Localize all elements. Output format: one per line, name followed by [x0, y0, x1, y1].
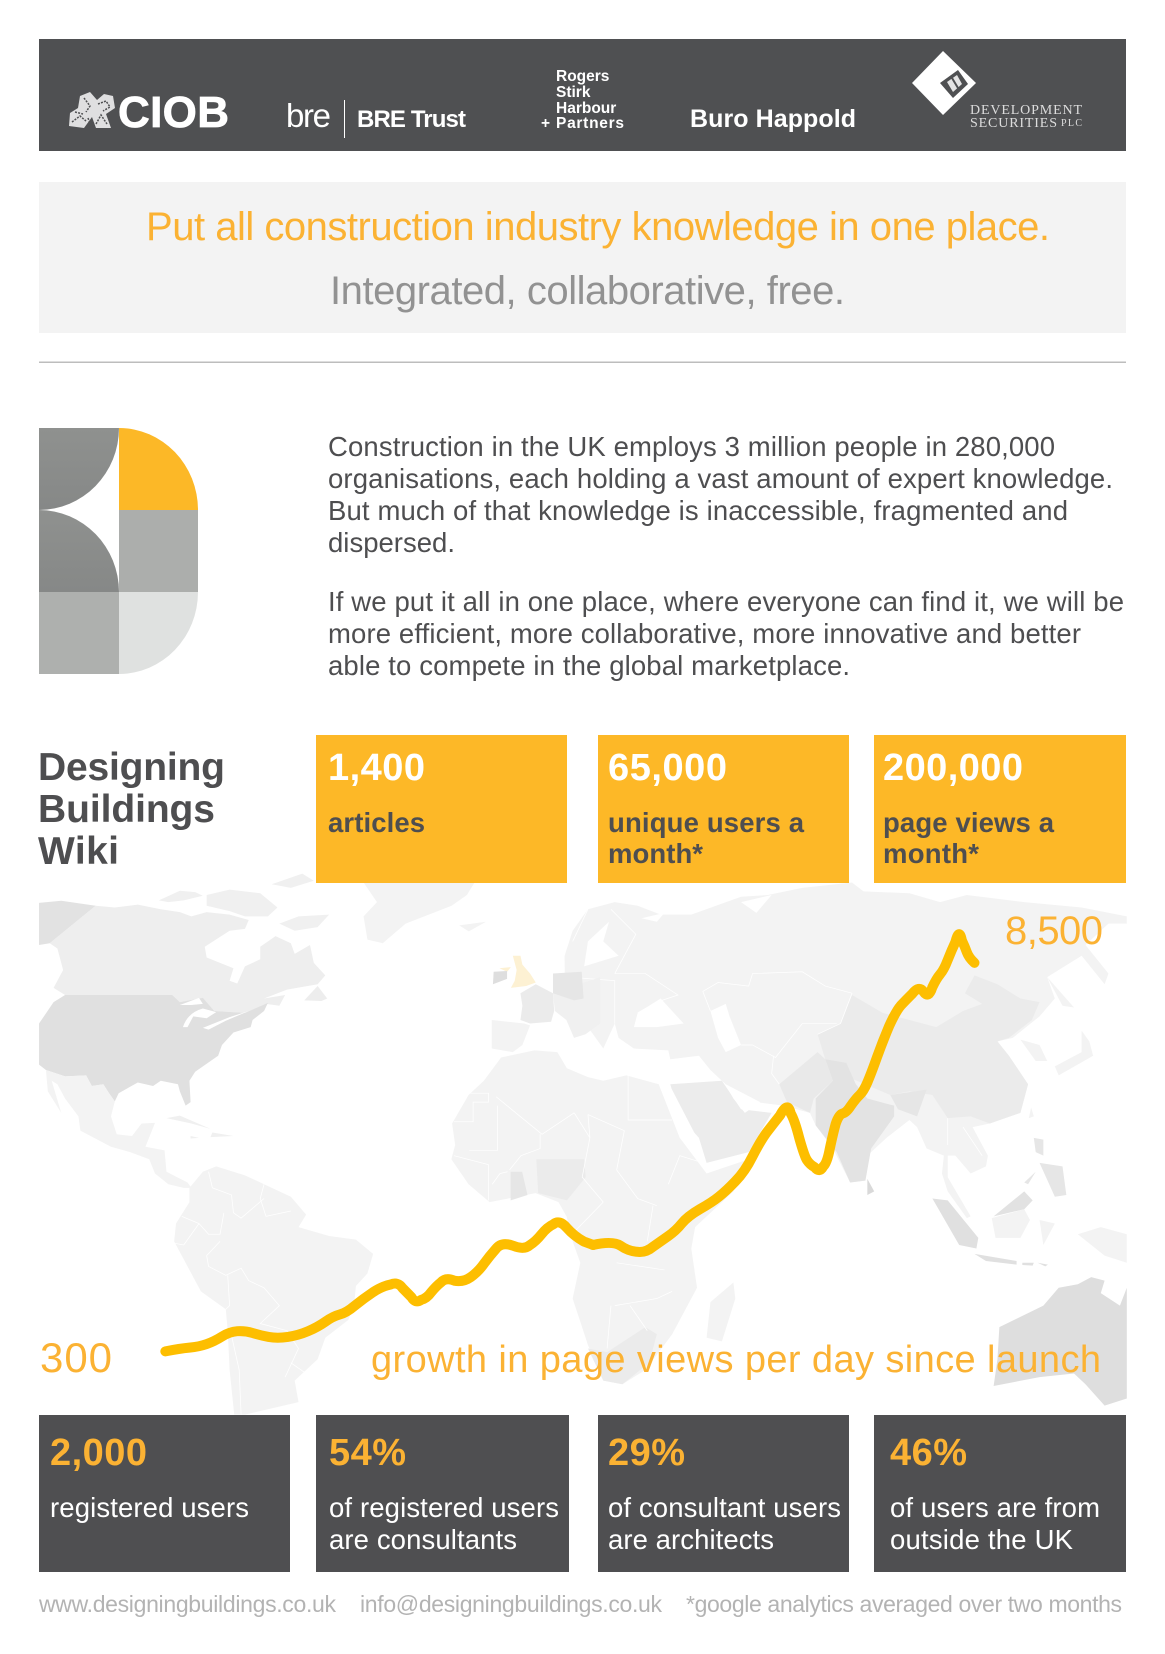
logo: Rogers Stirk Harbour + Partners: Rogers [556, 68, 609, 85]
title: Designing Buildings Wiki: Designing [38, 746, 225, 789]
logo: Rogers Stirk Harbour + Partners: + [541, 115, 550, 132]
intro text [328, 431, 1124, 681]
stat: 2,000 registered users: registered users [50, 1492, 249, 1523]
logo: CIOB: CIOB [118, 88, 229, 137]
logo: Rogers Stirk Harbour + Partners [541, 68, 624, 132]
eastern hemisphere map [451, 882, 1127, 1406]
stat: 29% architects: of consultant users [608, 1492, 841, 1523]
logo: BRE Trust [286, 97, 466, 138]
icon: Designing Buildings D logo [39, 428, 198, 674]
stat: 2,000 registered users [39, 1415, 290, 1572]
logo: BRE Trust: BRE Trust [357, 106, 466, 133]
stat: 65,000 unique users: 65,000 [608, 747, 727, 789]
chart caption: growth in page views per day since launch [371, 1339, 1101, 1381]
stat: 54% consultants [316, 1415, 569, 1572]
footer: www.designingbuildings.co.uk [38, 1591, 336, 1617]
logo: Development Securities: DEVELOPMENT [970, 103, 1082, 118]
intro text: But much of that knowledge is inaccessible, fragmented and [328, 495, 1068, 526]
intro text: Construction in the UK employs 3 million people in 280,000 [328, 431, 1055, 462]
stat: 46% outside UK [874, 1415, 1126, 1572]
stat: 54% consultants: are consultants [329, 1524, 517, 1555]
stat: 65,000 unique users: month* [608, 838, 703, 869]
tagline subheading: Integrated, collaborative, free. [330, 269, 845, 313]
title: Designing Buildings Wiki: Buildings [38, 788, 215, 831]
stat: 65,000 unique users [598, 735, 849, 883]
stat: 46% outside UK: outside the UK [890, 1524, 1074, 1555]
logo: Buro Happold: Buro Happold [690, 105, 856, 133]
stat: 1,400 articles [316, 735, 567, 883]
stat: 46% outside UK: of users are from [890, 1492, 1100, 1523]
stat: 1,400 articles: articles [328, 807, 425, 838]
logo: Development Securities: PLC [1061, 118, 1082, 129]
footer: info@designingbuildings.co.uk [360, 1591, 662, 1617]
footer: *google analytics averaged over two months [686, 1591, 1122, 1617]
stat: 29% architects: 29% [608, 1432, 685, 1474]
intro text: If we put it all in one place, where everyone can find it, we will be [328, 586, 1124, 617]
title: Designing Buildings Wiki [38, 746, 225, 873]
start value: 300 [40, 1334, 112, 1381]
intro text: organisations, each holding a vast amount of expert knowledge. [328, 463, 1113, 494]
stat: 200,000 page views: month* [883, 838, 979, 869]
world map [39, 874, 1127, 1415]
logo: Development Securities [912, 51, 1082, 131]
growth line [165, 934, 974, 1351]
stat: 200,000 page views: 200,000 [883, 747, 1023, 789]
stat: 46% outside UK: 46% [890, 1432, 967, 1474]
tagline heading: Put all construction industry knowledge in one place. [146, 205, 1050, 249]
stat: 2,000 registered users: 2,000 [50, 1432, 147, 1474]
title: Designing Buildings Wiki: Wiki [38, 830, 119, 873]
stat: 65,000 unique users: unique users a [608, 807, 805, 838]
stat: 200,000 page views: page views a [883, 807, 1055, 838]
logo: CIOB [69, 88, 229, 137]
growth chart [40, 909, 1103, 1381]
logo: Rogers Stirk Harbour + Partners: Harbour [556, 100, 616, 117]
western europe map [492, 956, 600, 1052]
logo: Rogers Stirk Harbour + Partners: Partners [556, 115, 624, 132]
intro text: dispersed. [328, 527, 455, 558]
logo: BRE Trust: bre [286, 97, 331, 134]
stat: 54% consultants: of registered users [329, 1492, 559, 1523]
stat: 1,400 articles: 1,400 [328, 747, 425, 789]
logo: Rogers Stirk Harbour + Partners: Stirk [556, 84, 591, 101]
header bar [39, 39, 1126, 151]
western hemisphere map [39, 874, 486, 1415]
intro text: more efficient, more collaborative, more innovative and better [328, 618, 1081, 649]
logo: Development Securities: SECURITIES [970, 116, 1057, 131]
stat: 29% architects [598, 1415, 849, 1572]
stat: 200,000 page views [874, 735, 1126, 883]
tagline panel [39, 182, 1126, 333]
end value: 8,500 [1005, 909, 1103, 953]
stat: 54% consultants: 54% [329, 1432, 406, 1474]
intro text: able to compete in the global marketplace. [328, 650, 850, 681]
stat: 29% architects: are architects [608, 1524, 774, 1555]
footer [38, 1591, 1122, 1617]
